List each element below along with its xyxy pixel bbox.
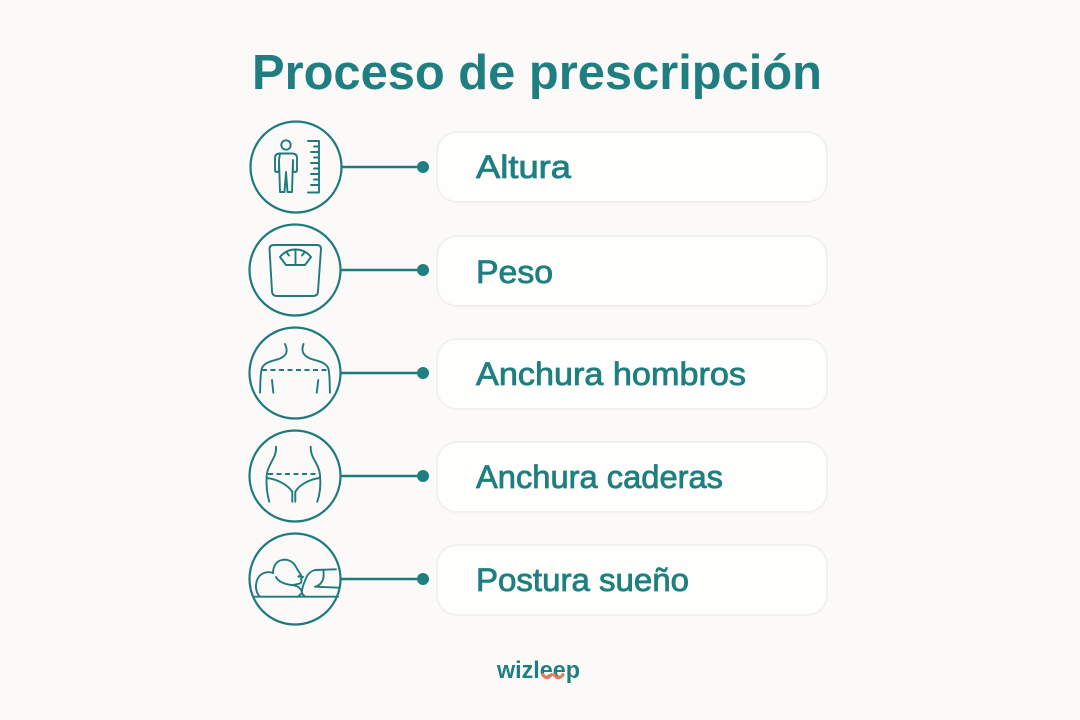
row: altura — [250, 122, 827, 212]
connector — [341, 470, 429, 482]
card: anchura hombros: Anchura hombros — [476, 356, 746, 392]
row: postura sueño — [250, 534, 827, 624]
icon: person with height ruler — [250, 122, 342, 212]
card: peso — [437, 236, 827, 306]
icon: shoulders — [250, 328, 340, 418]
row: anchura caderas — [250, 430, 827, 522]
row: anchura hombros — [250, 328, 827, 418]
row: peso — [250, 224, 827, 316]
connector — [341, 573, 429, 585]
icon: bathroom scale — [250, 224, 340, 316]
card: anchura caderas: Anchura caderas — [476, 459, 723, 495]
logo smile accents — [542, 674, 563, 678]
icon: sleeping person — [250, 534, 340, 624]
card: peso: Peso — [476, 254, 553, 290]
card: postura sueño — [437, 545, 827, 615]
logo: wizleep: wizleep — [496, 657, 580, 684]
card: postura sueño: Postura sueño — [476, 562, 689, 598]
card: anchura caderas — [437, 442, 827, 512]
card: altura — [437, 132, 827, 202]
connector — [341, 161, 429, 173]
connector — [341, 264, 429, 276]
connector — [341, 367, 429, 379]
card: anchura hombros — [437, 339, 827, 409]
title: Proceso de prescripción — [252, 46, 822, 100]
card: altura: Altura — [476, 149, 571, 185]
icon: hips — [250, 430, 340, 522]
